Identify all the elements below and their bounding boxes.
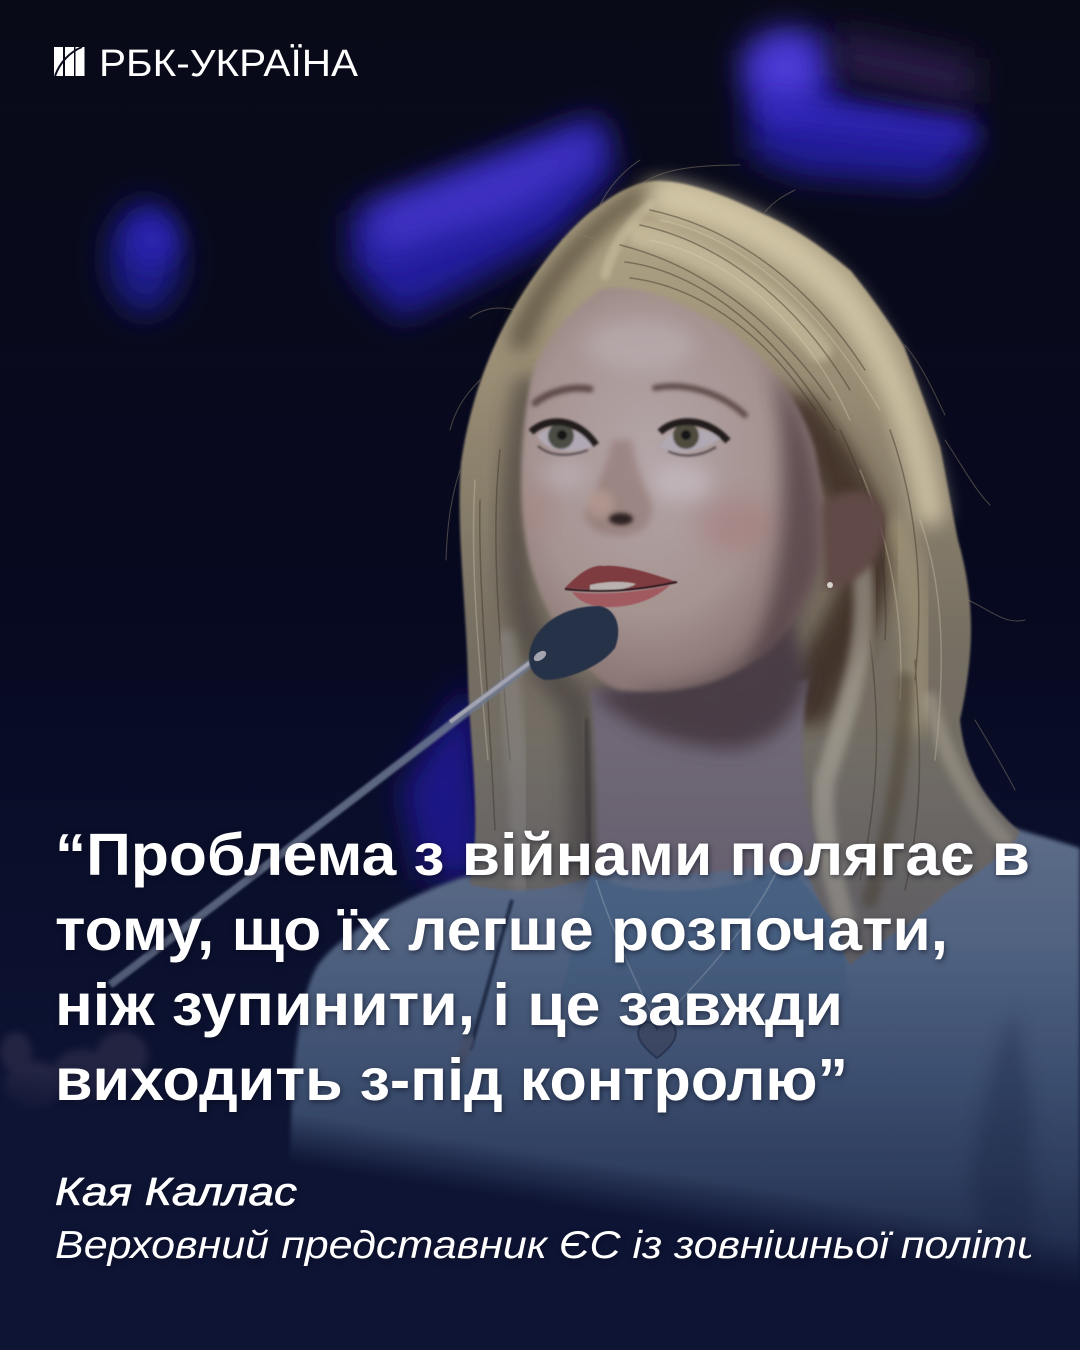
middle lamp bbox=[350, 115, 615, 320]
quote: виходить з-під контролю” bbox=[55, 1047, 848, 1113]
dark roots at the parting bbox=[520, 190, 650, 340]
figure: woman's jacket bbox=[290, 812, 1080, 1320]
chin shadow on neck bbox=[590, 620, 808, 750]
quote bbox=[55, 822, 1030, 1113]
hand in lower left bbox=[0, 1031, 148, 1109]
light lock at lower right bbox=[824, 570, 864, 920]
lanyard bbox=[470, 900, 512, 1050]
right lamp band bbox=[755, 98, 975, 142]
stage lights: blue blurred lamps bbox=[109, 30, 975, 880]
muted purple patch above band bbox=[835, 30, 975, 105]
bright sweep on the right bbox=[660, 195, 930, 510]
blue glow beside hair bbox=[400, 680, 490, 880]
right lamp top bbox=[747, 30, 823, 106]
face bbox=[521, 288, 885, 720]
earring bbox=[827, 582, 833, 588]
stray hairs bbox=[446, 160, 1025, 790]
figure: blond hair back bbox=[460, 181, 1020, 965]
nose bbox=[584, 440, 652, 536]
microphone bbox=[110, 606, 618, 985]
speaker title, clipped at right: Верховний представник ЄС із зовнішньої політи bbox=[55, 1224, 1041, 1267]
speaker title, clipped at right: ки bbox=[1041, 1224, 1080, 1267]
podium bbox=[0, 1040, 1080, 1350]
eyebrows bbox=[535, 386, 745, 415]
ear bbox=[822, 491, 885, 590]
eye left bbox=[531, 422, 596, 455]
face shadow on right bbox=[735, 370, 822, 685]
right lamp glow bbox=[745, 35, 975, 185]
lower left hair light bbox=[505, 640, 521, 880]
left lamp bbox=[109, 202, 181, 314]
mic ferrule bbox=[532, 649, 548, 663]
lapel shadow bbox=[970, 1010, 1035, 1255]
logo bbox=[54, 43, 359, 85]
dark hair left of the face bbox=[516, 390, 585, 870]
highlights bbox=[652, 462, 712, 502]
logo icon bbox=[54, 47, 84, 76]
brown shadow by the ear bbox=[800, 420, 870, 700]
nostril bbox=[609, 513, 633, 525]
quote: “Проблема з війнами полягає в bbox=[55, 822, 1030, 888]
fine strands bbox=[480, 210, 919, 890]
speaker name: Кая Каллас bbox=[55, 1171, 298, 1214]
attribution bbox=[56, 1178, 1031, 1266]
lips bbox=[565, 566, 677, 607]
mic head bbox=[529, 606, 618, 680]
quote: тому, що їх легше розпочати, bbox=[55, 897, 948, 963]
neck bbox=[590, 680, 818, 874]
quote: ніж зупинити, і це завжди bbox=[55, 972, 843, 1038]
hair strands and shading bbox=[446, 160, 1025, 920]
dark gaps at lower right bbox=[870, 680, 905, 900]
jacket collar bbox=[560, 865, 850, 1000]
dark bottom gradient overlay bbox=[0, 740, 1080, 1350]
eye right bbox=[660, 422, 728, 456]
logo wordmark: РБК-УКРАЇНА bbox=[99, 43, 359, 85]
necklace with heart pendant bbox=[596, 873, 776, 1058]
mic stem bbox=[110, 656, 540, 985]
jaw shadow bbox=[640, 615, 800, 720]
cheek blush bbox=[697, 497, 773, 553]
